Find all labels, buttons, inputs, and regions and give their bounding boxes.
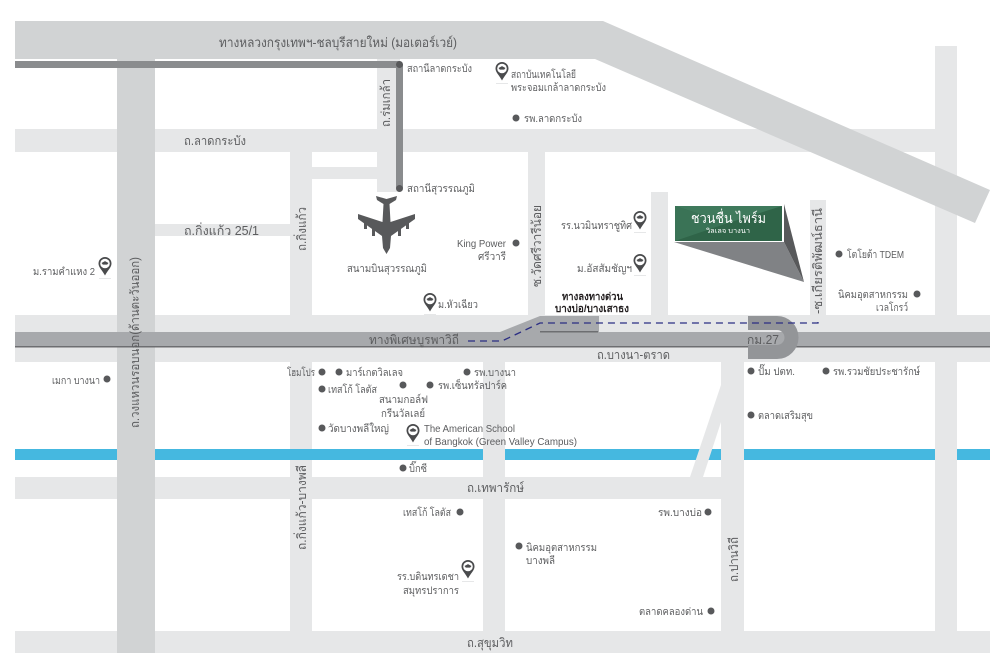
- road names: [128, 35, 825, 651]
- place: ตลาดเสริมสุข: ตลาดเสริมสุข: [758, 410, 813, 422]
- label: ปานวิถี: ถ.ปานวิถี: [727, 537, 741, 582]
- place: เมกา บางนา: เมกา บางนา: [52, 375, 100, 387]
- road: soi beside project: [651, 192, 668, 315]
- dashed route: [468, 318, 818, 341]
- road: ring road: [117, 59, 155, 653]
- road: วัดศรีวารีน้อย: [528, 152, 545, 315]
- project sign: [674, 206, 782, 242]
- pin: สถาบันเทคโนโลยี: [496, 62, 606, 94]
- place: King Power: ศรีวารี: [478, 250, 506, 263]
- sign title: ชวนชื่น ไพร์ม: [691, 209, 766, 226]
- road: ลาดกระบัง: [15, 129, 935, 152]
- place: รพ.เซ็นทรัลปาร์ค: รพ.เซ็นทรัลปาร์ค: [438, 378, 507, 392]
- road: เกียรติพัฒน์ธานี: [810, 200, 826, 315]
- ramp edge: [540, 331, 598, 332]
- rail vertical: [396, 64, 403, 188]
- label: บางนา-ตราด: ถ.บางนา-ตราด: [597, 348, 670, 362]
- rail horizontal: [15, 61, 400, 68]
- expressway exit label: บางบ่อ/บางเสาธง: [555, 303, 629, 315]
- place: รพ.ลาดกระบัง: รพ.ลาดกระบัง: [524, 113, 582, 125]
- place: นิคมบางพลี: บางพลี: [526, 554, 555, 567]
- label: วัดศรีวารีน้อย: ซ.วัดศรีวารีน้อย: [530, 205, 544, 287]
- pin: รร.บดินทรเดชา: รร.บดินทรเดชา: [397, 571, 459, 583]
- pin: ม.รามคำแหง 2: [33, 257, 112, 279]
- places with dots: [52, 113, 920, 618]
- pin: รร.บดินทรเดชา: สมุทรปราการ: [403, 585, 459, 597]
- marker side: [784, 204, 804, 282]
- place: บิ๊กซี: [400, 460, 427, 475]
- pin: ม.หัวเฉียว: ม.หัวเฉียว: [438, 298, 478, 311]
- stations labels: สถานีลาดกระบัง: [407, 62, 472, 75]
- pin: ม.อัสสัมชัญฯ: ม.อัสสัมชัญฯ: [577, 263, 632, 275]
- road: right vertical: [935, 46, 957, 631]
- place: สนามกอล์ฟ: [379, 382, 428, 420]
- label: ลาดกระบัง: ถ.ลาดกระบัง: [184, 134, 246, 148]
- place: เทสโก้ โลตัส: [318, 383, 378, 396]
- expressway exit label: ทางลงทางด่วน: [562, 291, 624, 303]
- road: right vertical over canal: [935, 362, 957, 631]
- place: King Power: [457, 238, 520, 263]
- road: connector: [312, 167, 377, 179]
- canal: blue stripe: [15, 449, 990, 460]
- place: รพ.เซ็นทรัลปาร์ค: [426, 378, 507, 392]
- label: ร่มเกล้า: ถ.ร่มเกล้า: [379, 79, 393, 127]
- sign facet top: [675, 206, 782, 223]
- place: ปั๊ม ปตท.: [748, 363, 795, 378]
- place: เทสโก้ โลตัส south: เทสโก้ โลตัส: [403, 506, 451, 519]
- pin: ม.รามคำแหง 2: ม.รามคำแหง 2: [33, 266, 95, 278]
- label: motorway: ทางหลวงกรุงเทพฯ-ชลบุรีสายใหม่ (มอเตอร์เวย์): [219, 35, 457, 51]
- expressway edge: [15, 346, 990, 348]
- place: โตโยต้า TDEM: โตโยต้า TDEM: [847, 248, 904, 261]
- place: ตลาดคลองด่าน: ตลาดคลองด่าน: [639, 606, 703, 618]
- places with school pins: [33, 62, 646, 597]
- label: กิ่งแก้ว-บางพลี: ถ.กิ่งแก้ว-บางพลี: [293, 465, 309, 550]
- stations labels: [407, 62, 475, 195]
- stations labels: สถานีสุวรรณภูมิ: [407, 182, 475, 195]
- road: diagonal: [690, 385, 721, 477]
- road: ร่มเกล้า: [377, 59, 400, 192]
- label: วงแหวน: ถ.วงแหวนรอบนอก(ด้านตะวันออก): [128, 257, 142, 428]
- road: เทพารักษ์: [15, 477, 721, 499]
- label: เทพารักษ์: ถ.เทพารักษ์: [467, 481, 524, 495]
- pin: American School: [406, 423, 577, 448]
- pin: รร.นวมินทราชูทิศ: [561, 211, 646, 233]
- road: สุขุมวิท: [15, 631, 990, 653]
- pin: ม.อัสสัมชัญฯ: [577, 254, 646, 276]
- sign facet left: [675, 206, 728, 241]
- pin: รร.บดินทรเดชา: [397, 560, 474, 597]
- interchange U-turn: [748, 323, 792, 352]
- road: กิ่งแก้ว: [290, 152, 312, 631]
- place: นิคมบางพลี: [516, 542, 597, 567]
- project marker: [674, 204, 804, 282]
- pin: American School: The American School: [424, 423, 515, 435]
- place: เทสโก้ โลตัส: เทสโก้ โลตัส: [328, 383, 378, 396]
- ramp: [500, 316, 599, 332]
- place: รพ.บางบ่อ: รพ.บางบ่อ: [658, 507, 702, 519]
- road: กิ่งแก้ว 25/1: [155, 224, 290, 236]
- place: นิคมบางพลี: นิคมอุตสาหกรรม: [526, 542, 597, 554]
- marker shadow: [674, 242, 804, 282]
- place: รพ.บางนา: รพ.บางนา: [474, 367, 516, 379]
- sign subtitle: วิลเลจ บางนา: [706, 227, 750, 235]
- place: สนามกอล์ฟ: กรีนวัลเลย์: [381, 407, 425, 420]
- station dot: ลาดกระบัง: [396, 61, 403, 68]
- label: เกียรติพัฒน์ธานี: -ซ.เกียรติพัฒน์ธานี: [811, 208, 825, 314]
- label: สุขุมวิท: ถ.สุขุมวิท: [467, 636, 513, 651]
- label: airport: สนามบินสุวรรณภูมิ: [347, 263, 427, 275]
- place: นิคมเวลโกรว์: นิคมอุตสาหกรรม: [838, 289, 908, 301]
- place: โฮมโปร: โฮมโปร: [287, 366, 315, 379]
- place: นิคมเวลโกรว์: [838, 289, 920, 314]
- pin: ม.หัวเฉียว: [424, 293, 478, 315]
- pin: สถาบันเทคโนโลยี: พระจอมเกล้าลาดกระบัง: [511, 82, 606, 94]
- place: นิคมเวลโกรว์: เวลโกรว์: [876, 301, 908, 314]
- place: ปั๊ม ปตท.: ปั๊ม ปตท.: [758, 363, 795, 378]
- place: โตโยต้า TDEM: [836, 248, 904, 261]
- expressway exit label: [555, 291, 629, 315]
- label: กิ่งแก้ว: ถ.กิ่งแก้ว: [293, 207, 309, 251]
- road: motorway: [15, 21, 990, 223]
- place: วัดบางพลีใหญ่: วัดบางพลีใหญ่: [328, 422, 389, 435]
- pin: American School: of Bangkok (Green Valley Campus): [424, 436, 577, 448]
- pin: สถาบันเทคโนโลยี: สถาบันเทคโนโลยี: [511, 68, 576, 81]
- road: บางนา-ตราด: [15, 315, 990, 362]
- icon: airplane: [358, 196, 415, 254]
- road: burapha withi expressway: [15, 332, 990, 347]
- label: กิ่งแก้ว 25/1: ถ.กิ่งแก้ว 25/1: [184, 222, 259, 238]
- place: King Power: King Power: [457, 238, 506, 250]
- pin: รร.นวมินทราชูทิศ: รร.นวมินทราชูทิศ: [561, 220, 632, 232]
- road: central vertical: [483, 362, 505, 631]
- place: สนามกอล์ฟ: สนามกอล์ฟ: [379, 393, 428, 406]
- station dot: สุวรรณภูมิ: [396, 185, 403, 192]
- place: บิ๊กซี: บิ๊กซี: [409, 460, 427, 475]
- airport rail link: [15, 61, 403, 192]
- label: กม.27: กม.27: [747, 333, 779, 347]
- road: ปานวิถี: [721, 362, 744, 631]
- label: พิเศษบูรพาวิถี: ทางพิเศษบูรพาวิถี: [369, 333, 459, 348]
- place: มาร์เกตวิลเลจ: มาร์เกตวิลเลจ: [346, 366, 403, 379]
- place: รพ.รวมชัยประชารักษ์: รพ.รวมชัยประชารักษ์: [833, 365, 920, 378]
